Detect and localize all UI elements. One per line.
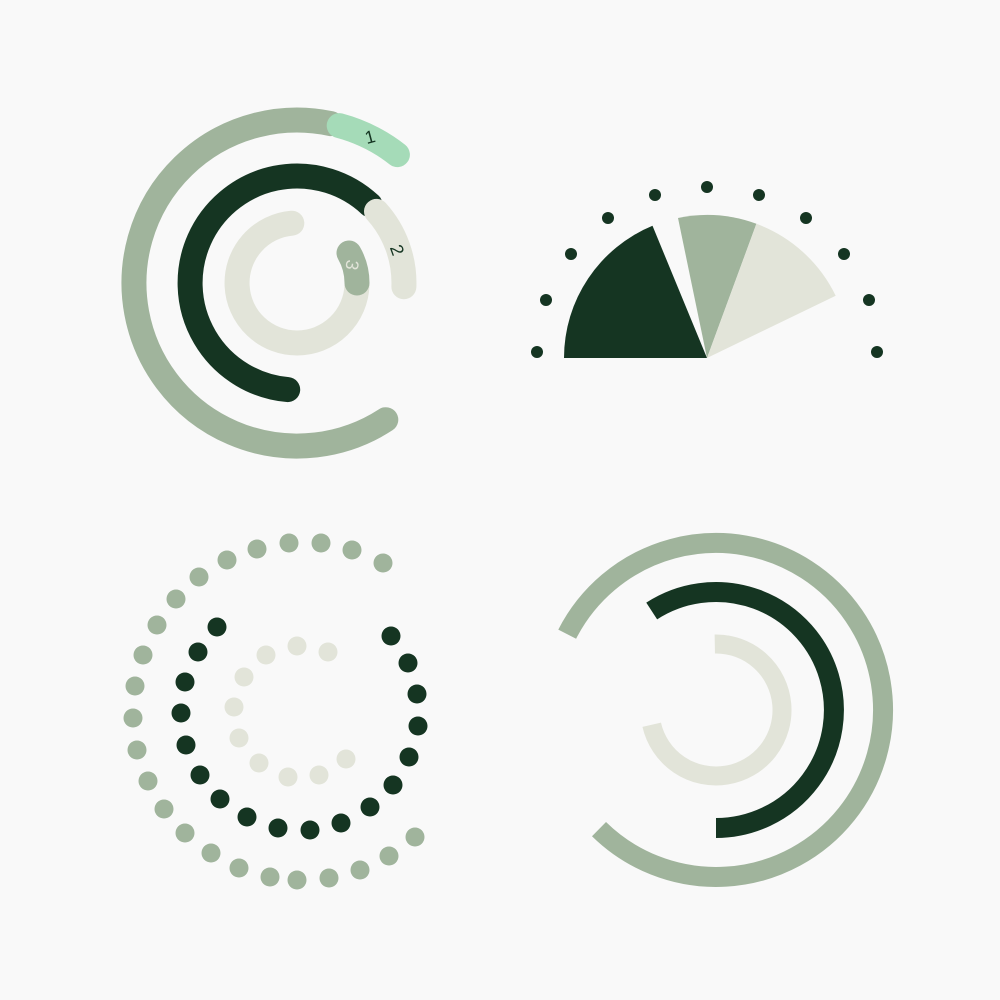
inner light ring bbox=[237, 223, 357, 343]
inner light dotted ring bbox=[224, 636, 356, 786]
panel: concentric progress rings (top-left) bbox=[134, 120, 408, 446]
panel: open arc rings (bottom-right) bbox=[567, 543, 883, 877]
panel: semicircle pie gauge (top-right) bbox=[531, 181, 883, 358]
middle dark dotted ring bbox=[172, 618, 428, 840]
dark sector bbox=[564, 226, 707, 358]
inner light arc bbox=[652, 644, 782, 776]
middle dark ring bbox=[190, 176, 370, 390]
outer dotted ring bbox=[124, 534, 424, 890]
label 3: 3 bbox=[341, 258, 363, 272]
segment 3 (gray) bbox=[349, 253, 357, 283]
light sector bbox=[707, 224, 836, 358]
label 1: 1 bbox=[363, 126, 377, 148]
outer gray arc bbox=[567, 543, 883, 877]
outer gray ring bbox=[134, 120, 386, 446]
panel: dotted rings (bottom-left) bbox=[124, 534, 428, 890]
gray sector bbox=[678, 215, 756, 358]
gauge dots bbox=[531, 181, 883, 358]
label 2: 2 bbox=[386, 242, 408, 258]
segment 2 (light) bbox=[376, 211, 404, 287]
middle dark arc bbox=[652, 592, 834, 828]
segment 1 (light green) bbox=[339, 126, 397, 155]
